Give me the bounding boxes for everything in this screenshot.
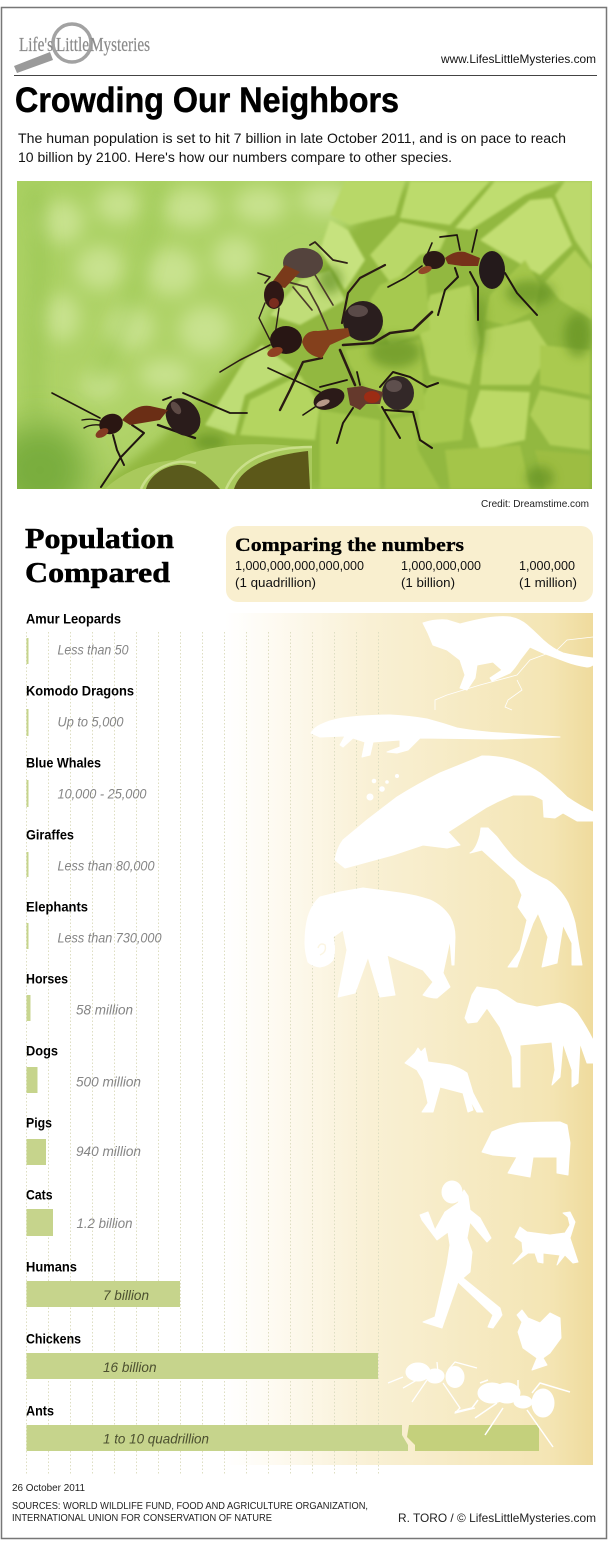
silhouette: pig [482, 1122, 570, 1177]
logo: Life's Little Mysteries: Mysteries [90, 34, 150, 56]
species rows: names and values: Komodo Dragons [26, 682, 134, 698]
silhouette: chicken [517, 1310, 561, 1370]
ant bottom [268, 368, 438, 448]
heading: Population Compared: Compared [25, 558, 170, 589]
chart background gradient [225, 613, 593, 1465]
intro text [18, 130, 566, 165]
species rows: names and values: 7 billion [103, 1287, 149, 1303]
silhouette: horse [465, 987, 593, 1087]
species rows: names and values: 10,000 - 25,000 [58, 786, 147, 802]
species rows: names and values: Up to 5,000 [58, 714, 124, 730]
ant top middle [258, 242, 347, 340]
species rows: names and values: Elephants [26, 898, 88, 914]
dark blurred tones [34, 181, 160, 420]
panel: comparing the numbers: 1,000,000,000,000,000 [235, 559, 364, 573]
footer: credit: R. TORO / © LifesLittleMysteries.com [398, 1511, 596, 1525]
species rows: names and values: 940 million [76, 1143, 141, 1159]
species rows: names and values: Humans [26, 1258, 77, 1274]
species rows: names and values: Amur Leopards [26, 610, 121, 626]
photo credit: Credit: Dreamstime.com [481, 498, 589, 510]
panel: comparing the numbers: 1,000,000,000 [401, 559, 481, 573]
species rows: names and values [26, 610, 209, 1446]
silhouette: blue whale and bubbles [335, 756, 593, 868]
logo: Life's Little Mysteries: Little [56, 34, 89, 56]
species rows: names and values: Blue Whales [26, 754, 101, 770]
species rows: names and values: Less than 730,000 [58, 930, 162, 946]
in-focus leaf surface [95, 181, 592, 489]
heading: Population Compared: Population [25, 524, 174, 555]
panel: comparing the numbers: (1 million) [519, 576, 577, 590]
species rows: names and values: Chickens [26, 1330, 81, 1346]
silhouette: elephant [305, 888, 455, 998]
species rows: names and values: Horses [26, 970, 68, 986]
intro text: The human population is set to hit 7 billion in late October 2011, and is on pace to reach [18, 130, 566, 146]
silhouette: giraffe [470, 828, 582, 967]
ant centre [220, 265, 432, 410]
species rows: names and values: Ants [26, 1402, 54, 1418]
blurred background cells [40, 184, 351, 399]
footer: date: 26 October 2011 [12, 1483, 85, 1494]
species rows: names and values: Giraffes [26, 826, 74, 842]
title: Crowding Our Neighbors [15, 81, 399, 120]
heading: Population Compared [25, 524, 174, 589]
footer: sources: INTERNATIONAL UNION FOR CONSERVATION OF NATURE [12, 1513, 272, 1524]
panel: comparing the numbers: (1 quadrillion) [235, 576, 316, 590]
silhouette: running woman [420, 1181, 502, 1328]
species rows: names and values: 16 billion [103, 1359, 157, 1375]
species rows: names and values: 1 to 10 quadrillion [103, 1430, 209, 1446]
ant right [388, 230, 537, 320]
in-focus leaf mosaic cells [205, 181, 592, 489]
silhouette: ant large [455, 1380, 570, 1447]
species rows: names and values: Less than 50 [58, 642, 129, 658]
shaded areas of the leaf [194, 266, 592, 490]
photo: ants on a green leaf [17, 181, 592, 489]
footer: sources: SOURCES: WORLD WILDLIFE FUND, FOOD AND AGRICULTURE ORGANIZATION, [12, 1501, 368, 1512]
species rows: names and values: Pigs [26, 1114, 52, 1130]
silhouette: ant small [388, 1362, 477, 1413]
species rows: names and values: 1.2 billion [76, 1215, 133, 1231]
panel: comparing the numbers: Comparing the numbers [235, 536, 464, 556]
species rows: names and values: 58 million [76, 1002, 133, 1018]
species rows: names and values: Cats [26, 1186, 53, 1202]
leaf holes at the bottom edge [105, 444, 312, 489]
silhouette: komodo dragon [311, 715, 560, 757]
panel: comparing the numbers [226, 526, 593, 602]
species rows: names and values: Dogs [26, 1042, 58, 1058]
website url: www.LifesLittleMysteries.com [440, 52, 596, 66]
panel: comparing the numbers: 1,000,000 [519, 559, 575, 573]
logo: Life's Little Mysteries: Life's [19, 34, 53, 56]
bar chart: population by species [26, 638, 539, 1451]
species rows: names and values: 500 million [76, 1074, 141, 1090]
intro text: 10 billion by 2100. Here's how our numbers compare to other species. [18, 149, 452, 165]
logo: Life's Little Mysteries [14, 24, 150, 73]
species rows: names and values: Less than 80,000 [58, 858, 155, 874]
panel: comparing the numbers: (1 billion) [401, 576, 455, 590]
silhouette: dog [405, 1048, 483, 1112]
silhouette: leopard [423, 617, 593, 710]
ant left [52, 391, 247, 487]
footer: sources [12, 1501, 368, 1524]
silhouette: cat [513, 1212, 578, 1265]
